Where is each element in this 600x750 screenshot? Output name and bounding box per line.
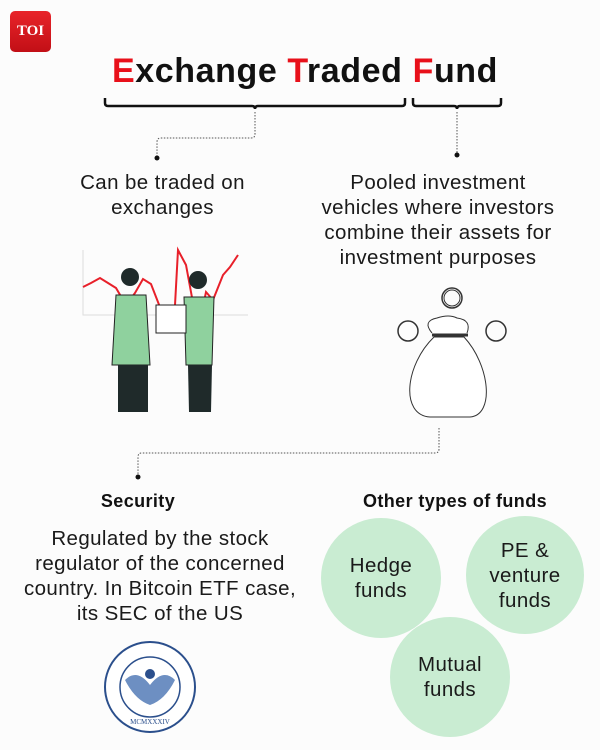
text: regulated: country. In Bitcoin ETF case, [24,577,296,600]
text: regulated: regulator of the concerned [35,552,285,575]
circle: hedge funds: Hedge [350,554,412,577]
logo: TOI [10,11,51,52]
title: Exchange Traded Fund [112,52,498,90]
circle: hedge funds: funds [355,579,407,602]
circle: PE & venture funds: PE & [501,538,549,562]
text: pooled investment [322,171,554,269]
circle: mutual funds [390,617,510,737]
circle: mutual funds: Mutual [418,653,482,676]
circle: mutual funds: funds [424,678,476,701]
text: can be traded [80,171,245,219]
icon: SEC seal [104,641,196,733]
circle: PE & venture funds: venture [489,564,561,586]
circle: PE & venture funds: funds [499,588,551,612]
text: can be traded: Can be traded on [80,171,245,194]
text: pooled investment: combine their assets for [324,221,552,244]
heading: security: Security [101,491,175,511]
text: regulated: Regulated by the stock [51,527,269,550]
text: regulated [24,527,296,625]
text: pooled investment: Pooled investment [350,171,526,194]
heading: other types: Other types of funds [363,491,547,511]
text: regulated: its SEC of the US [77,602,243,625]
text: pooled investment: investment purposes [340,246,536,269]
circle: PE & venture funds [466,516,584,634]
circle: hedge funds [321,518,441,638]
text: pooled investment: vehicles where investors [322,196,554,219]
text: can be traded: exchanges [111,196,214,219]
icon: SEC seal: MCMXXXIV [130,718,170,726]
illustration: money bag with coins [397,287,507,418]
illustration: two traders with chart [82,246,248,412]
logo: TOI: TOI [17,23,44,39]
